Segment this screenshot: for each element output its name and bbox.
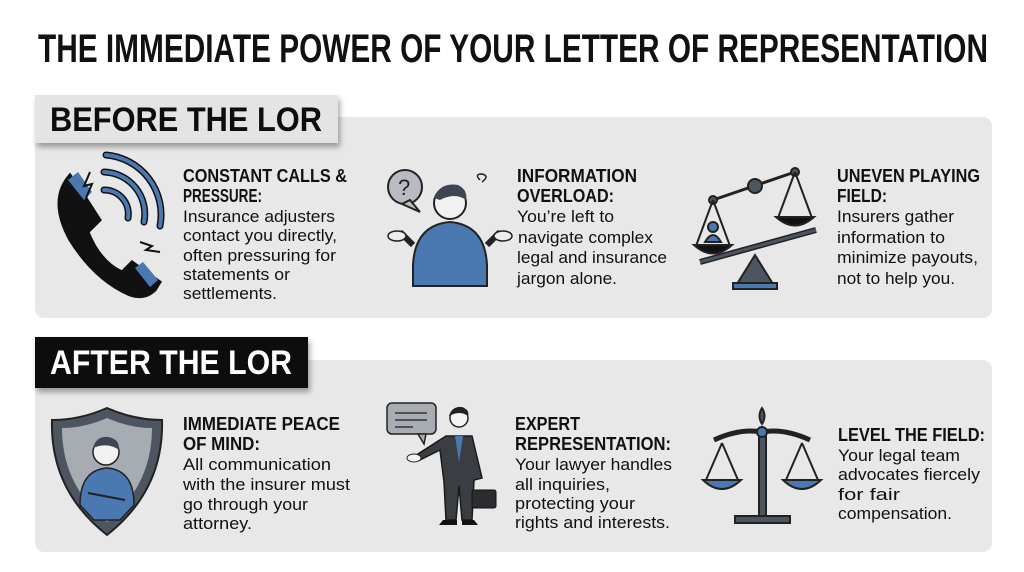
text: constant calls: statements or	[183, 265, 290, 284]
text: level the field: for fair	[838, 485, 900, 504]
text: constant calls: CONSTANT CALLS &	[183, 166, 347, 186]
text: expert representation: Your lawyer handles	[515, 455, 672, 474]
text: level the field	[838, 425, 985, 523]
text: information overload	[516, 166, 667, 288]
text: constant calls: often pressuring for	[183, 246, 336, 265]
heading: after the lor	[35, 337, 308, 388]
text: level the field: Your legal team	[838, 446, 960, 465]
panel: after	[35, 337, 992, 552]
text: expert representation: EXPERT	[515, 414, 580, 434]
text: constant calls: Insurance adjusters	[183, 207, 335, 226]
text: information overload: You’re left to	[517, 207, 614, 226]
text: information overload: navigate complex	[518, 228, 653, 247]
heading: before the lor: BEFORE THE LOR	[50, 101, 322, 139]
text: uneven playing field: FIELD:	[837, 186, 887, 206]
text: constant calls: settlements.	[183, 284, 277, 303]
text: peace of mind: All communication	[183, 455, 331, 474]
text: peace of mind: attorney.	[183, 514, 252, 533]
text: peace of mind: IMMEDIATE PEACE	[183, 414, 340, 434]
text: information overload: jargon alone.	[516, 269, 617, 288]
text: uneven playing field: UNEVEN PLAYING	[837, 166, 980, 186]
text: level the field: advocates fiercely	[838, 465, 981, 484]
text: constant calls: PRESSURE:	[183, 186, 262, 206]
icon: shield with person	[52, 408, 162, 535]
text: level the field: compensation.	[838, 504, 952, 523]
icon: confused person	[388, 170, 512, 286]
text: peace of mind: OF MIND:	[183, 434, 260, 454]
text: expert representation: all inquiries,	[515, 475, 610, 494]
text: expert representation	[515, 414, 672, 532]
panel: before	[35, 95, 992, 318]
heading: after the lor: AFTER THE LOR	[50, 344, 292, 382]
text: expert representation: rights and interests.	[515, 513, 670, 532]
text: level the field: LEVEL THE FIELD:	[838, 425, 985, 445]
text: uneven playing field: not to help you.	[837, 269, 955, 288]
text: peace of mind	[182, 414, 350, 533]
text: constant calls	[183, 166, 347, 303]
text: uneven playing field: minimize payouts,	[837, 248, 978, 267]
icon: ringing phone	[59, 155, 161, 297]
text: information overload: legal and insurance	[517, 248, 667, 267]
text: uneven playing field: information to	[837, 228, 945, 247]
text: peace of mind: go through your	[183, 495, 308, 514]
text: uneven playing field	[837, 166, 980, 288]
text: peace of mind: with the insurer must	[182, 475, 350, 494]
text: constant calls: contact you directly,	[183, 226, 337, 245]
text: expert representation: protecting your	[515, 494, 635, 513]
icon: balanced scale	[703, 408, 821, 523]
icon: confused person: ?	[398, 175, 410, 200]
text: expert representation: REPRESENTATION:	[515, 434, 671, 454]
text: information overload: INFORMATION	[517, 166, 637, 186]
icon: lawyer	[387, 403, 496, 525]
text: information overload: OVERLOAD:	[517, 186, 614, 206]
text: uneven playing field: Insurers gather	[837, 207, 954, 226]
icon: uneven scale	[694, 168, 816, 289]
